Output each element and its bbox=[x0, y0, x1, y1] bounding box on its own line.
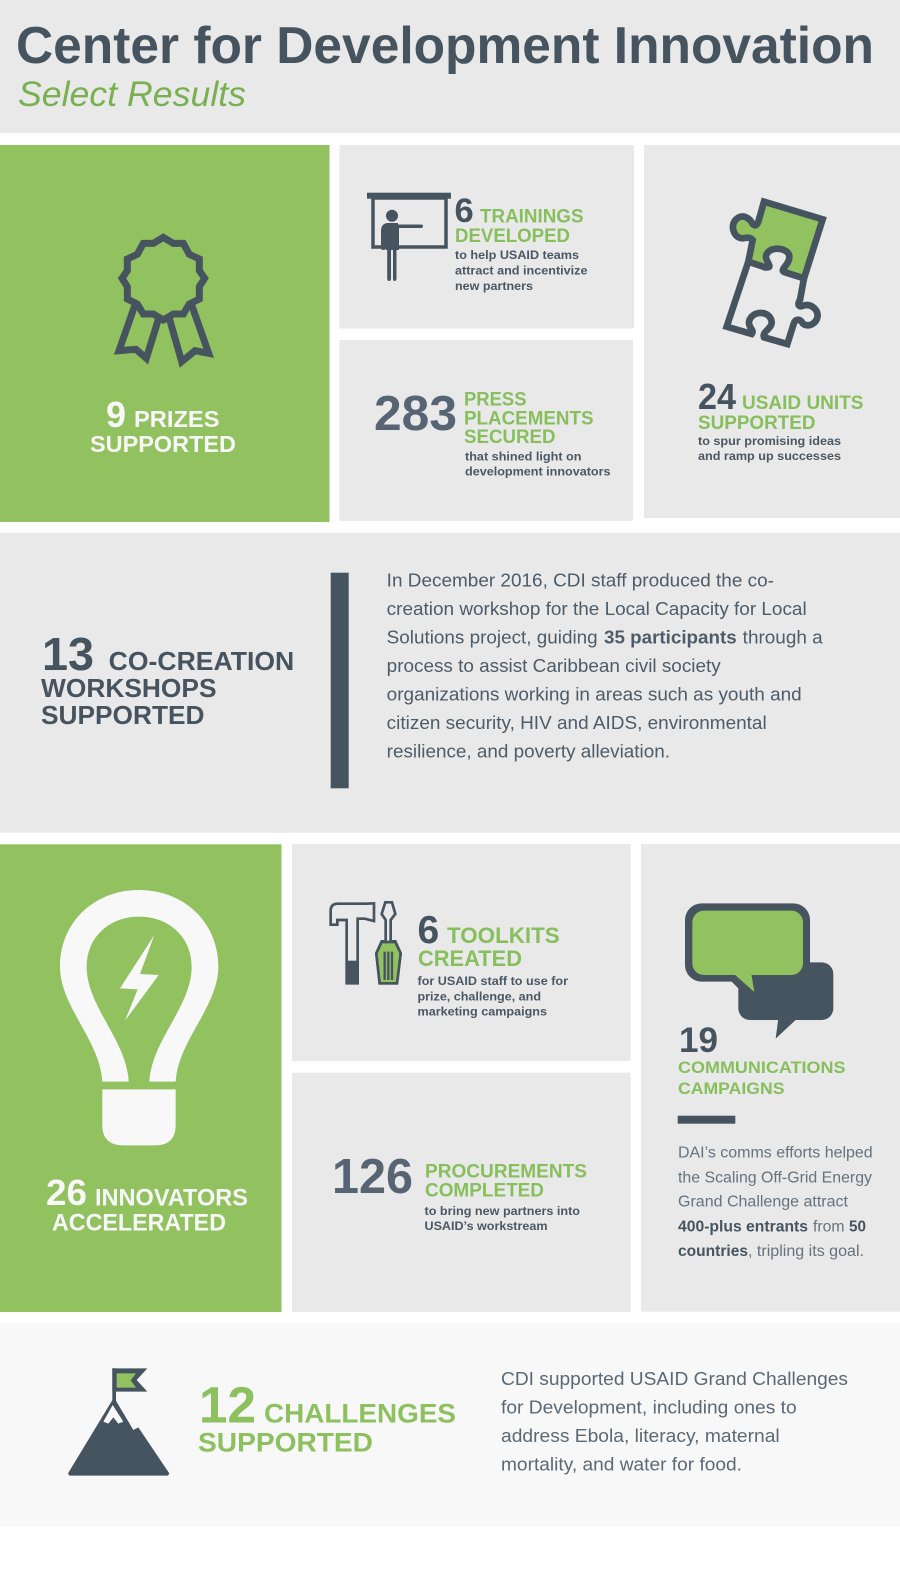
heading: procurements completed bbox=[425, 1161, 587, 1202]
icon: speech bubbles bbox=[685, 903, 833, 1039]
stat: 6 toolkits created: CREATED bbox=[418, 946, 522, 971]
stat: 6 trainings developed: DEVELOPED bbox=[455, 226, 570, 247]
text: workshop paragraph: 35 participants bbox=[604, 628, 737, 648]
icon: puzzle pieces bbox=[727, 202, 823, 344]
text: toolkits description: prize, challenge, and bbox=[418, 990, 541, 1004]
text: challenges paragraph: address Ebola, literacy, maternal bbox=[501, 1426, 780, 1446]
stat: 26 innovators accelerated: ACCELERATED bbox=[52, 1210, 226, 1237]
stat: 9 prizes supported: PRIZES bbox=[134, 406, 220, 432]
stat: 13 co-creation workshops supported bbox=[41, 628, 294, 730]
text: toolkits description: for USAID staff to use for bbox=[418, 974, 568, 988]
panel: challenges bbox=[0, 1323, 900, 1527]
icon: award ribbon bbox=[119, 237, 209, 362]
stat: 24 USAID units supported: USAID UNITS bbox=[742, 393, 864, 414]
heading: press placements secured: PLACEMENTS bbox=[464, 408, 594, 429]
short divider bar bbox=[678, 1116, 735, 1124]
text: procurements description: to bring new partners into bbox=[424, 1204, 580, 1218]
title: Center for Development Innovation bbox=[16, 17, 874, 75]
text: procurements description: USAID’s workstream bbox=[424, 1219, 548, 1233]
panel: procurements bbox=[292, 1073, 630, 1312]
stat: 6 trainings developed bbox=[454, 192, 584, 247]
icon: hammer and screwdriver bbox=[331, 902, 401, 983]
vertical divider bar bbox=[331, 573, 349, 788]
panel: co-creation workshops bbox=[0, 533, 900, 833]
text: challenges paragraph: CDI supported USAID Grand Challenges bbox=[501, 1369, 848, 1389]
stat: 9 prizes supported: SUPPORTED bbox=[90, 431, 236, 457]
stat: 26 innovators accelerated bbox=[46, 1172, 248, 1237]
heading: procurements completed: COMPLETED bbox=[425, 1181, 544, 1202]
heading: press placements secured: PRESS bbox=[464, 390, 526, 411]
icon: mountain with flag bbox=[68, 1368, 169, 1476]
text: workshop paragraph: organizations working in areas such as youth and bbox=[387, 685, 802, 705]
panel: trainings bbox=[340, 145, 634, 328]
text: toolkits description bbox=[418, 974, 568, 1019]
panel: communications campaigns bbox=[641, 844, 900, 1312]
heading: procurements completed: PROCUREMENTS bbox=[425, 1161, 587, 1182]
heading: press placements secured: SECURED bbox=[464, 427, 556, 448]
text: workshop paragraph: process to assist Caribbean civil society bbox=[387, 656, 721, 676]
stat: 283: 283 bbox=[374, 387, 457, 441]
text: workshop paragraph: In December 2016, CDI staff produced the co- bbox=[387, 571, 774, 591]
text: units description bbox=[698, 434, 841, 463]
text: trainings description: new partners bbox=[455, 279, 533, 293]
panel: header bbox=[0, 0, 900, 133]
stat: 9 prizes supported: 9 bbox=[106, 394, 126, 435]
text: workshop paragraph: through a bbox=[743, 628, 824, 648]
text: workshop paragraph bbox=[387, 571, 824, 762]
stat: 9 prizes supported bbox=[90, 394, 236, 457]
text: workshop paragraph: creation workshop for the Local Capacity for Local bbox=[387, 599, 807, 619]
text: communications paragraph bbox=[678, 1144, 873, 1260]
text: trainings description: attract and incentivize bbox=[455, 264, 588, 278]
text: workshop paragraph: resilience, and poverty alleviation. bbox=[387, 742, 670, 762]
stat: 19: 19 bbox=[679, 1021, 718, 1060]
stat: 12 challenges supported: 12 bbox=[199, 1377, 256, 1434]
text: trainings description bbox=[455, 248, 588, 293]
text: communications paragraph: DAI’s comms efforts helped bbox=[678, 1144, 873, 1161]
stat: 12 challenges supported bbox=[198, 1377, 456, 1458]
stat: 13 co-creation workshops supported: WORKSHOPS bbox=[41, 673, 216, 703]
text: workshop paragraph: citizen security, HIV and AIDS, environmental bbox=[387, 713, 767, 733]
stat: 6 trainings developed: TRAININGS bbox=[480, 207, 584, 228]
text: communications paragraph: from bbox=[813, 1218, 844, 1235]
text: press description bbox=[465, 450, 611, 479]
stat: 6 trainings developed: 6 bbox=[454, 192, 474, 230]
text: units description: to spur promising ideas bbox=[698, 434, 841, 448]
text: communications paragraph: countries bbox=[678, 1243, 748, 1260]
stat: 24 USAID units supported: 24 bbox=[698, 376, 736, 417]
stat: 12 challenges supported: SUPPORTED bbox=[198, 1428, 373, 1458]
panel: toolkits bbox=[292, 844, 630, 1061]
stat: 26 innovators accelerated: 26 bbox=[46, 1172, 87, 1213]
stat: 24 USAID units supported: SUPPORTED bbox=[698, 413, 816, 434]
text: communications paragraph: , tripling its goal. bbox=[748, 1243, 864, 1260]
heading: press placements secured bbox=[464, 390, 594, 448]
heading: communications campaigns bbox=[678, 1058, 846, 1098]
stat: 13 co-creation workshops supported: SUPPORTED bbox=[41, 700, 205, 730]
text: challenges paragraph: mortality, and water for food. bbox=[501, 1455, 742, 1475]
text: press description: development innovators bbox=[465, 465, 611, 479]
stat: 13 co-creation workshops supported: 13 bbox=[42, 628, 94, 680]
text: press description: that shined light on bbox=[465, 450, 582, 464]
icon: presenter at board bbox=[367, 193, 451, 281]
stat: 126: 126 bbox=[332, 1150, 413, 1204]
stat: 6 toolkits created bbox=[418, 909, 560, 971]
panel: USAID units bbox=[644, 145, 900, 518]
stat: 6 toolkits created: 6 bbox=[418, 909, 439, 952]
stat: 12 challenges supported: CHALLENGES bbox=[264, 1399, 456, 1429]
subtitle: Select Results bbox=[18, 75, 246, 114]
text: communications paragraph: Grand Challenge attract bbox=[678, 1194, 849, 1211]
stat: 6 toolkits created: TOOLKITS bbox=[447, 923, 560, 948]
text: workshop paragraph: Solutions project, guiding bbox=[387, 628, 598, 648]
stat: 26 innovators accelerated: INNOVATORS bbox=[95, 1185, 248, 1212]
icon: light bulb bbox=[60, 890, 218, 1145]
text: procurements description bbox=[424, 1204, 580, 1233]
text: challenges paragraph: for Development, including ones to bbox=[501, 1397, 797, 1417]
heading: communications campaigns: COMMUNICATIONS bbox=[678, 1058, 846, 1077]
text: communications paragraph: 400-plus entrants bbox=[678, 1218, 808, 1235]
panel: innovators bbox=[0, 844, 282, 1312]
text: units description: and ramp up successes bbox=[698, 449, 841, 463]
text: trainings description: to help USAID teams bbox=[455, 248, 579, 262]
text: communications paragraph: the Scaling Off-Grid Energy bbox=[678, 1169, 872, 1186]
stat: 24 USAID units supported bbox=[698, 376, 864, 434]
heading: communications campaigns: CAMPAIGNS bbox=[678, 1079, 784, 1098]
stat: 13 co-creation workshops supported: CO-CREATION bbox=[109, 646, 294, 676]
text: challenges paragraph bbox=[501, 1369, 848, 1475]
panel: prizes bbox=[0, 145, 330, 522]
text: toolkits description: marketing campaigns bbox=[418, 1005, 547, 1019]
text: communications paragraph: 50 bbox=[849, 1218, 866, 1235]
panel: press placements bbox=[340, 340, 633, 521]
